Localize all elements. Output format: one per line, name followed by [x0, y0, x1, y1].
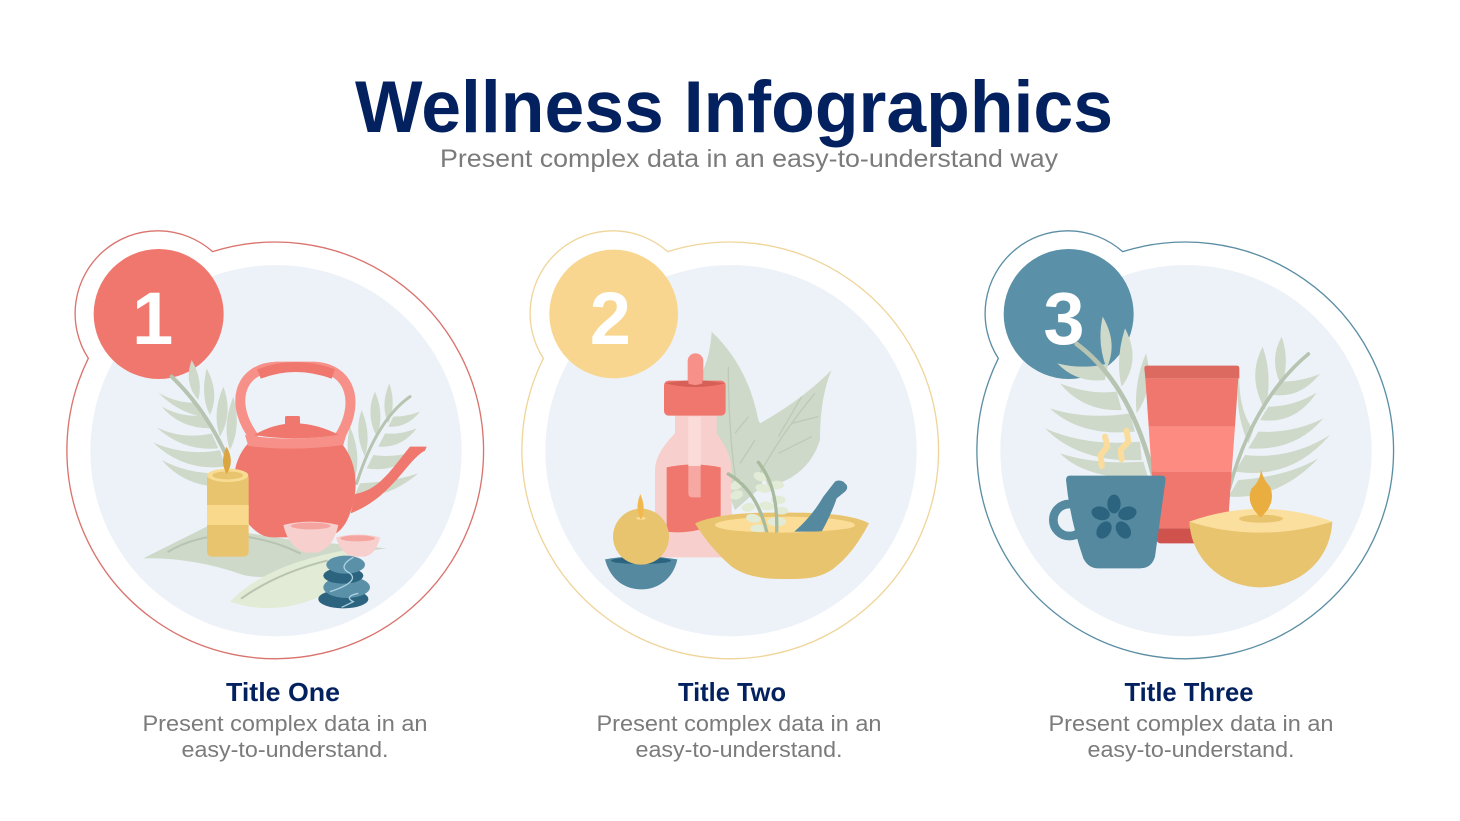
number badge: 3	[1043, 277, 1085, 360]
title: Wellness Infographics	[355, 67, 1113, 148]
icon: green leaf mat	[143, 527, 387, 577]
background circle	[1000, 265, 1372, 636]
number badge: 2	[590, 277, 631, 360]
number badge	[1004, 249, 1134, 379]
icon: dropper bottle	[655, 353, 732, 557]
subtitle: Present complex data in an easy-to-understand way	[440, 145, 1059, 173]
number badge: 1	[132, 277, 173, 360]
icon: steam	[1101, 431, 1128, 466]
icon: candle bowl	[1189, 469, 1332, 587]
caption: title two: Present complex data in an	[596, 711, 882, 736]
icon: left palm frond	[153, 360, 237, 487]
icon: tea cups	[283, 522, 380, 557]
caption: title one: Title One	[226, 677, 340, 707]
background circle	[90, 265, 462, 636]
caption: title one: Present complex data in an	[142, 711, 428, 736]
caption: title two	[596, 677, 882, 762]
caption: title three	[1048, 677, 1334, 762]
icon: candle in bowl	[605, 494, 677, 589]
number badge	[94, 249, 224, 379]
icon: light leaf	[230, 549, 350, 608]
icon: red tube	[1144, 366, 1239, 543]
icon: tea cup	[1053, 476, 1166, 568]
caption: title three: Present complex data in an	[1048, 711, 1334, 736]
caption: title one	[142, 677, 428, 762]
panel: step three	[977, 231, 1394, 659]
icon: stacked stones	[318, 556, 370, 608]
panel: step one	[67, 231, 484, 659]
number badge	[549, 250, 678, 378]
caption: title one: easy-to-understand.	[182, 737, 388, 762]
caption: title two: Title Two	[678, 677, 786, 707]
icon: right palm frond	[348, 383, 420, 496]
outline	[522, 231, 939, 659]
caption: title two: easy-to-understand.	[636, 737, 842, 762]
icon: right palm frond	[1228, 337, 1330, 497]
icon: left palm frond	[1045, 317, 1153, 478]
icon: large leaves	[702, 332, 832, 510]
outline	[67, 231, 484, 659]
icon: candle	[207, 447, 249, 557]
panel: step two	[522, 231, 939, 659]
outline	[977, 231, 1394, 659]
caption: title three: Title Three	[1124, 677, 1254, 707]
icon: mortar and pestle	[695, 462, 869, 579]
icon: teapot	[234, 367, 427, 537]
caption: title three: easy-to-understand.	[1088, 737, 1294, 762]
background circle	[545, 265, 917, 636]
